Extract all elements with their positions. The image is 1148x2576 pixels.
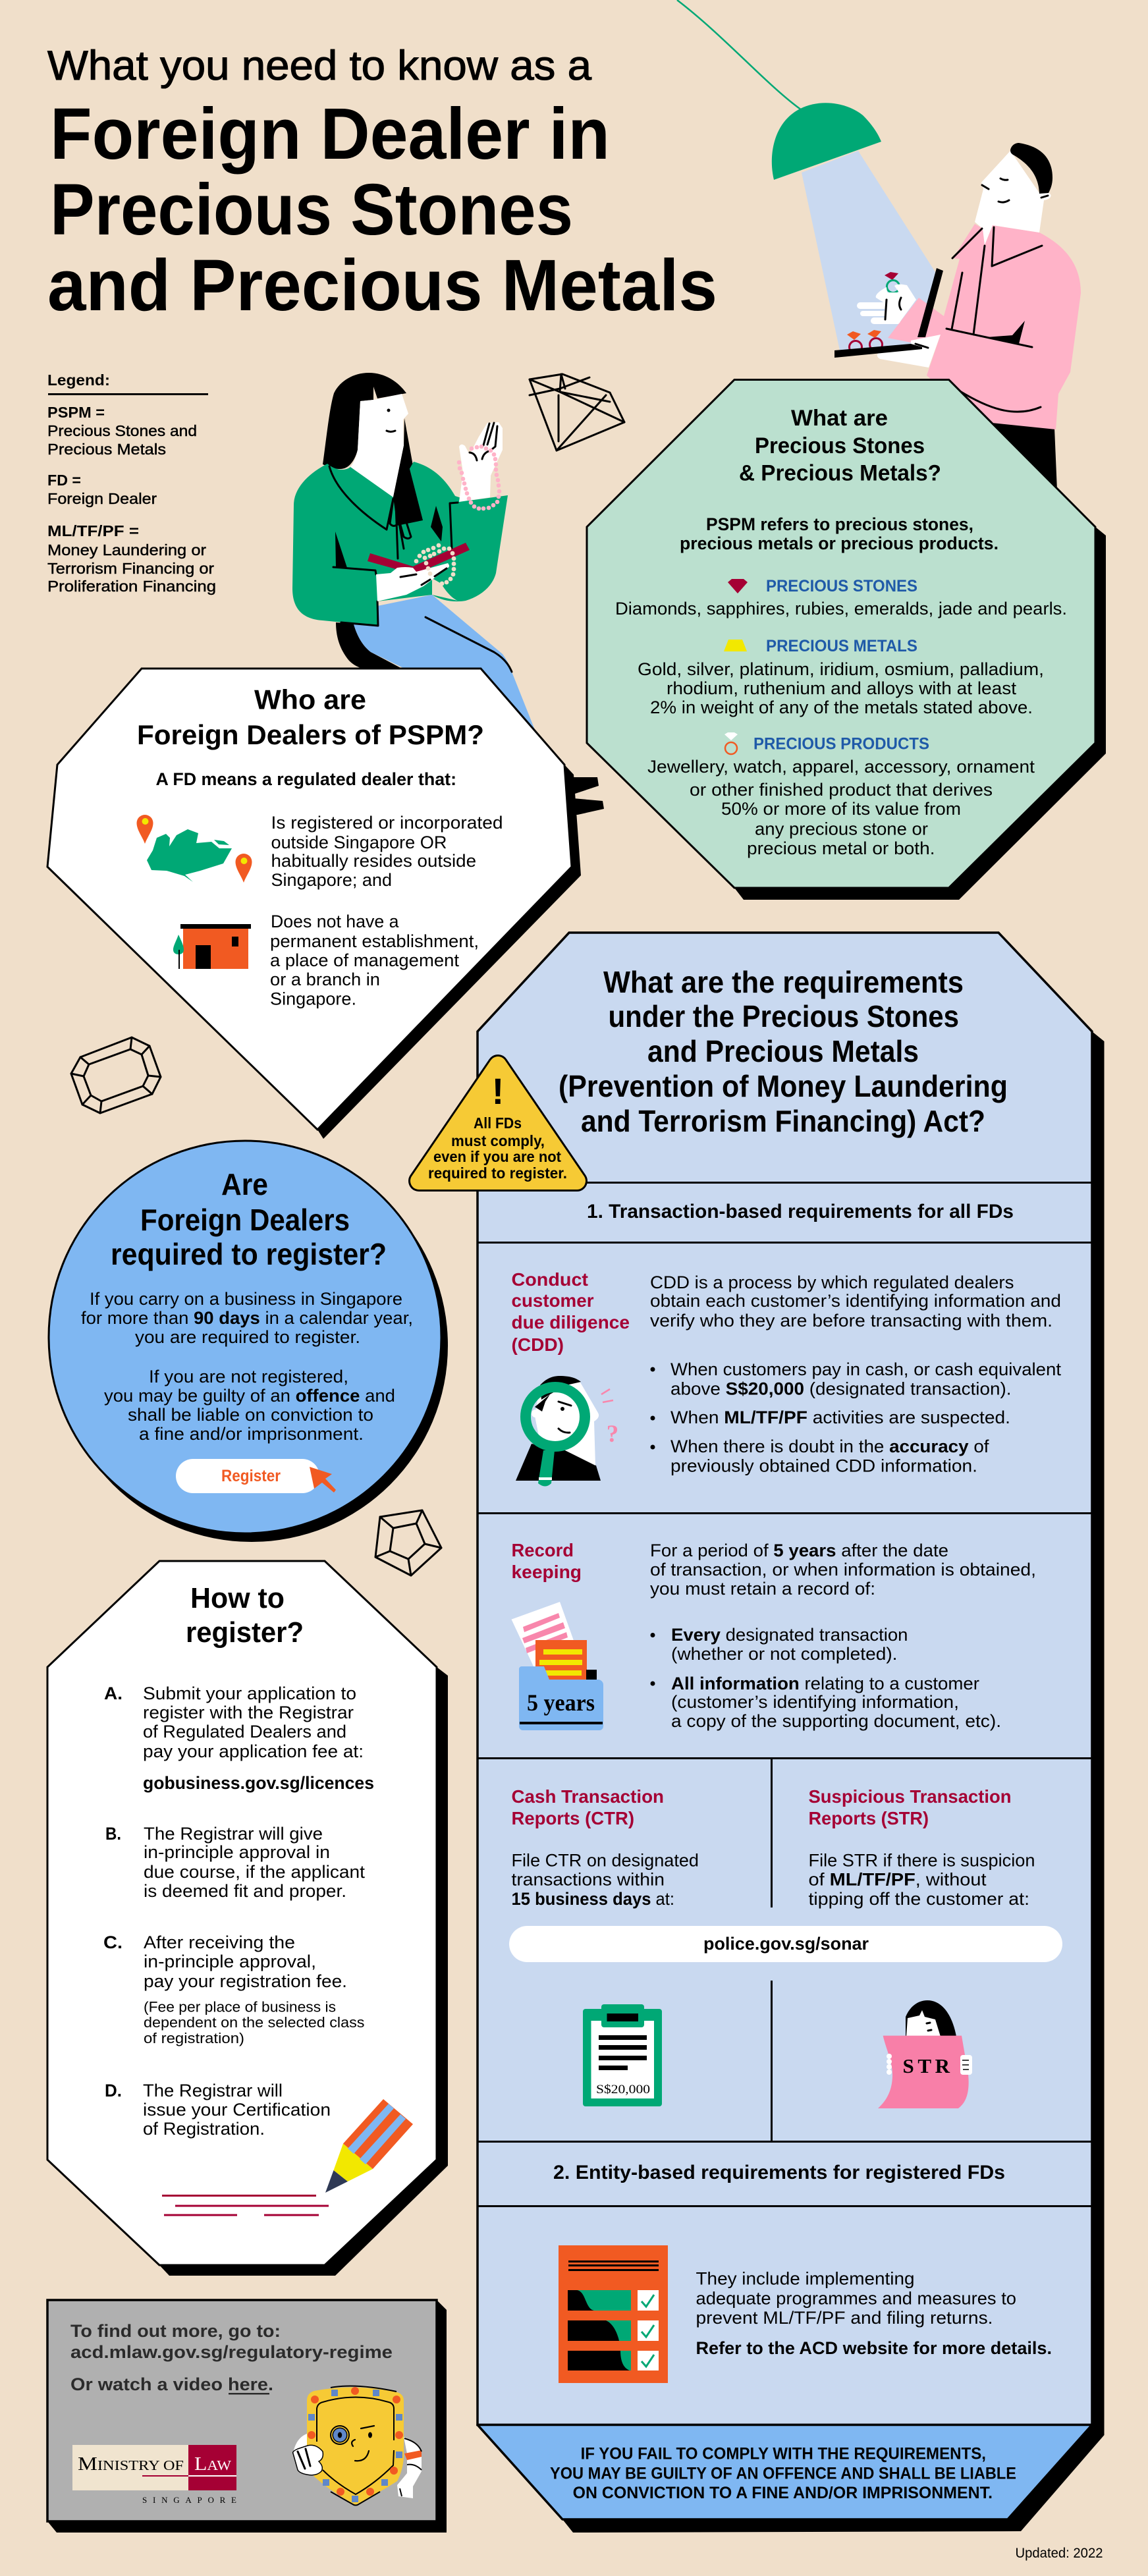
CDD label: due diligence — [511, 1312, 630, 1332]
icon: clipboard: S$20,000 — [596, 2083, 650, 2096]
CTR text: File CTR on designated — [511, 1851, 699, 1871]
warning banner: ON CONVICTION TO A FINE AND/OR IMPRISONMENT. — [573, 2484, 993, 2502]
CDD description: verify who they are before transacting with them. — [650, 1311, 1052, 1330]
heading: How to — [190, 1582, 285, 1614]
record keeping description: For a period of 5 years after the date — [650, 1541, 948, 1560]
record keeping description: Every designated transaction — [671, 1625, 908, 1645]
entity-based description — [696, 2268, 1052, 2358]
logo: Ministry of Law: LAW — [194, 2453, 231, 2475]
step A: of Regulated Dealers and — [143, 1722, 346, 1741]
CDD description: When ML/TF/PF activities are suspected. — [670, 1408, 1010, 1427]
icon: clipboard — [583, 2004, 662, 2106]
entity-based description: Refer to the ACD website for more details. — [696, 2338, 1052, 2358]
step B: B. — [105, 1824, 121, 1844]
step A: Submit your application to — [143, 1684, 356, 1703]
written lines — [162, 2195, 329, 2216]
heading: register? — [186, 1616, 304, 1649]
heading: What are — [791, 406, 888, 431]
icon: folder with documents: 5 years — [527, 1689, 595, 1716]
STR text: tipping off the customer at: — [809, 1889, 1029, 1909]
icon: man with magnifying glass — [516, 1376, 618, 1486]
step C — [103, 1932, 365, 2046]
STR text — [809, 1786, 1035, 1909]
precious stones text: Diamonds, sapphires, rubies, emeralds, jade and pearls. — [615, 599, 1067, 618]
step A: A. — [104, 1684, 123, 1703]
legend: Money Laundering or — [47, 541, 206, 559]
logo: Ministry of Law: SINGAPORE — [142, 2495, 236, 2505]
intro text: PSPM refers to precious stones, — [706, 514, 973, 534]
precious products text: precious metal or both. — [747, 838, 935, 858]
icon: folder with documents — [511, 1602, 603, 1730]
precious metals text: 2% in weight of any of the metals stated above. — [650, 698, 1033, 717]
STR text: File STR if there is suspicion — [809, 1851, 1035, 1871]
CDD label: Conduct — [511, 1269, 588, 1290]
callout: all FDs must comply — [419, 1065, 577, 1182]
step C: (Fee per place of business is — [144, 1998, 336, 2015]
warning banner: YOU MAY BE GUILTY OF AN OFFENCE AND SHALL BE LIABLE — [550, 2465, 1016, 2483]
CTR text: Cash Transaction — [511, 1786, 664, 1807]
text block: shall be liable on conviction to — [128, 1405, 373, 1425]
step B — [105, 1824, 366, 1901]
callout: all FDs must comply: required to register. — [428, 1165, 567, 1182]
heading — [111, 1167, 387, 1271]
legend: Proliferation Financing — [47, 578, 216, 595]
step D: issue your Certification — [143, 2100, 331, 2120]
step C: in-principle approval, — [144, 1952, 316, 1971]
heading: (Prevention of Money Laundering — [559, 1069, 1008, 1103]
legend: Precious Stones and — [47, 422, 197, 439]
text block: for more than 90 days in a calendar year, — [81, 1308, 413, 1328]
precious stones text — [615, 577, 1067, 618]
STR text: of ML/TF/PF , without — [809, 1870, 987, 1890]
link pill: police.gov.sg/sonar: police.gov.sg/sonar — [703, 1934, 869, 1954]
record keeping description: All information relating to a customer — [671, 1674, 979, 1693]
step A: gobusiness.gov.sg/licences — [143, 1773, 374, 1793]
CDD description: When there is doubt in the accuracy of — [670, 1437, 989, 1456]
panel: what are precious stones and metals — [587, 379, 1106, 900]
heading: Who are — [254, 684, 366, 715]
text block: you may be guilty of an offence and — [104, 1386, 395, 1406]
icon: gold bar — [724, 640, 747, 651]
panel: are foreign dealers required to register — [49, 1141, 448, 1542]
record keeping description: a copy of the supporting document, etc). — [671, 1711, 1001, 1731]
precious products text: 50% or more of its value from — [721, 799, 961, 819]
step A: register with the Registrar — [143, 1703, 354, 1722]
precious products text: or other finished product that derives — [690, 780, 993, 800]
icon: pencil writing — [325, 2099, 413, 2193]
legend: Foreign Dealer — [47, 490, 157, 507]
icon: checklist document — [559, 2245, 668, 2383]
step C: of registration) — [144, 2030, 244, 2046]
title: and Precious Metals — [47, 245, 717, 326]
precious metals text — [638, 637, 1044, 717]
text: first criterion: Singapore; and — [271, 870, 392, 890]
panel: who are foreign dealers — [47, 669, 581, 1139]
icon: man with magnifying glass: ? — [607, 1421, 618, 1448]
title: Foreign Dealer in — [50, 94, 610, 175]
panel: how to register — [47, 1561, 448, 2276]
text: first criterion: habitually resides outside — [271, 851, 476, 871]
icon: ruby — [728, 579, 748, 593]
text: second criterion: Does not have a — [271, 912, 399, 931]
text block — [81, 1289, 413, 1444]
heading: Are — [221, 1167, 268, 1201]
heading: Precious Stones — [755, 433, 925, 458]
step A — [104, 1684, 374, 1793]
CDD description: When customers pay in cash, or cash equivalent — [670, 1359, 1062, 1379]
warning banner — [478, 2425, 1092, 2519]
step B: The Registrar will give — [144, 1824, 323, 1844]
text: second criterion: Singapore. — [270, 989, 356, 1009]
step A: pay your application fee at: — [143, 1741, 364, 1761]
intro text — [680, 514, 998, 553]
precious products text: Jewellery, watch, apparel, accessory, ornament — [647, 757, 1035, 777]
step D: The Registrar will — [143, 2081, 283, 2100]
legend: FD = — [47, 472, 81, 489]
arrow: cursor — [310, 1467, 336, 1493]
links text: Or watch a video here. — [70, 2374, 273, 2394]
section heading 2: 2. Entity-based requirements for registered FDs — [553, 2162, 1005, 2183]
heading — [739, 406, 941, 486]
CDD description: above S$20,000 (designated transaction). — [670, 1379, 1012, 1399]
logo: Ministry of Law: MINISTRY OF — [78, 2453, 184, 2475]
precious products text: PRECIOUS PRODUCTS — [753, 735, 929, 754]
panel: find out more — [47, 2300, 447, 2533]
callout: all FDs must comply: All FDs — [474, 1114, 522, 1132]
legend: Legend: — [47, 371, 110, 389]
text block: If you are not registered, — [149, 1367, 348, 1386]
CTR text: Reports (CTR) — [511, 1808, 634, 1828]
step C: dependent on the selected class — [144, 2014, 365, 2031]
subheading: A FD means a regulated dealer that: — [155, 769, 456, 789]
callout: all FDs must comply: ! — [492, 1070, 504, 1112]
CTR text: transactions within — [511, 1870, 665, 1890]
callout: all FDs must comply: even if you are not — [433, 1148, 561, 1165]
legend: ML/TF/PF = — [47, 522, 139, 539]
icon: woman holding STR report — [878, 2000, 972, 2108]
CDD description: CDD is a process by which regulated dealers — [650, 1273, 1014, 1292]
step D — [105, 2081, 331, 2139]
illustration: man holding ring — [834, 143, 1081, 501]
record keeping description: you must retain a record of: — [650, 1579, 875, 1599]
entity-based description: adequate programmes and measures to — [696, 2289, 1016, 2309]
text: first criterion: outside Singapore OR — [271, 833, 447, 852]
links text: To find out more, go to: — [70, 2321, 281, 2341]
heading: Foreign Dealers of PSPM? — [137, 719, 484, 750]
title: What you need to know as a — [47, 43, 592, 89]
links text — [70, 2321, 393, 2395]
text: second criterion: permanent establishment, — [270, 931, 479, 951]
heading: Foreign Dealers — [140, 1203, 350, 1237]
CDD label: customer — [511, 1290, 594, 1311]
warning banner: IF YOU FAIL TO COMPLY WITH THE REQUIREMENTS, — [581, 2445, 986, 2463]
icon: ring — [724, 732, 738, 754]
title — [47, 43, 717, 326]
register button — [176, 1459, 319, 1493]
precious metals text: PRECIOUS METALS — [766, 637, 917, 655]
step C: pay your registration fee. — [144, 1971, 347, 1991]
record keeping description: (whether or not completed). — [671, 1644, 897, 1664]
step C: After receiving the — [144, 1932, 295, 1952]
record keeping label — [511, 1540, 582, 1582]
step B: in-principle approval in — [144, 1842, 330, 1862]
precious products text — [647, 735, 1035, 858]
lamp with light cone — [677, 0, 935, 350]
entity-based description: prevent ML/TF/PF and filing returns. — [696, 2308, 993, 2328]
STR text: Suspicious Transaction — [809, 1786, 1012, 1807]
CDD description: previously obtained CDD information. — [670, 1456, 977, 1476]
illustration: woman with jewellery — [292, 373, 537, 736]
text block: If you carry on a business in Singapore — [90, 1289, 402, 1309]
heading — [137, 684, 484, 750]
step D: D. — [105, 2081, 122, 2100]
precious metals text: Gold, silver, platinum, iridium, osmium, palladium, — [638, 659, 1044, 679]
updated note: Updated: 2022 — [1016, 2546, 1103, 2561]
record keeping description: of transaction, or when information is obtained, — [650, 1560, 1036, 1579]
CDD label: (CDD) — [511, 1334, 564, 1355]
CTR text — [511, 1786, 699, 1909]
legend — [47, 371, 216, 595]
precious stones text: PRECIOUS STONES — [766, 577, 917, 595]
text block: you are required to register. — [135, 1327, 360, 1347]
legend: PSPM = — [47, 404, 105, 421]
heading: & Precious Metals? — [739, 461, 941, 486]
CTR text: 15 business days at: — [511, 1889, 674, 1909]
panel dividers — [478, 1182, 1092, 2207]
entity-based description: They include implementing — [696, 2268, 914, 2288]
text: first criterion: Is registered or incorporated — [271, 813, 503, 833]
heading: and Precious Metals — [647, 1034, 919, 1068]
legend: Precious Metals — [47, 441, 166, 458]
STR text: Reports (STR) — [809, 1808, 929, 1828]
precious products text: any precious stone or — [755, 819, 928, 839]
link pill: police.gov.sg/sonar — [509, 1926, 1062, 1962]
heading — [559, 965, 1008, 1138]
icon: emerald-cut gem outline — [71, 1037, 161, 1113]
step B: is deemed fit and proper. — [144, 1881, 346, 1901]
intro text: precious metals or precious products. — [680, 534, 998, 553]
record keeping description: (customer’s identifying information, — [671, 1692, 959, 1712]
heading: What are the requirements — [603, 965, 964, 999]
stool legs — [566, 777, 604, 815]
icon: shield mascot — [293, 2386, 422, 2506]
CDD label — [511, 1269, 630, 1355]
section heading 1: 1. Transaction-based requirements for all FDs — [587, 1201, 1014, 1222]
icon: diamond outline — [530, 374, 624, 451]
CDD description — [650, 1273, 1062, 1476]
step C: C. — [103, 1932, 123, 1952]
links text: acd.mlaw.gov.sg/regulatory-regime — [70, 2342, 393, 2362]
record keeping label: keeping — [511, 1562, 582, 1582]
step B: due course, if the applicant — [144, 1862, 366, 1882]
step D: of Registration. — [143, 2119, 265, 2139]
record keeping description — [650, 1541, 1036, 1731]
legend: Terrorism Financing or — [47, 560, 214, 577]
title: Precious Stones — [50, 169, 573, 250]
callout: all FDs must comply: must comply, — [451, 1132, 545, 1149]
logo: Ministry of Law — [72, 2445, 236, 2505]
heading: required to register? — [111, 1237, 387, 1271]
icon: map of Singapore with pins — [137, 815, 252, 883]
register button: Register — [221, 1467, 281, 1485]
heading: and Terrorism Financing) Act? — [581, 1104, 985, 1138]
heading: under the Precious Stones — [609, 999, 959, 1033]
record keeping label: Record — [511, 1540, 574, 1560]
CDD description: obtain each customer’s identifying information and — [650, 1291, 1061, 1311]
icon: woman holding STR report: STR — [902, 2054, 950, 2077]
icon: building with tree — [173, 924, 251, 969]
text block: a fine and/or imprisonment. — [139, 1424, 364, 1444]
panel: requirements under the act — [478, 933, 1104, 2533]
icon: pentagon gem outline — [375, 1510, 441, 1576]
text: second criterion — [270, 912, 479, 1009]
precious metals text: rhodium, ruthenium and alloys with at least — [667, 678, 1017, 698]
text: second criterion: a place of management — [270, 950, 460, 970]
text: second criterion: or a branch in — [270, 970, 380, 989]
heading — [186, 1582, 304, 1649]
text: first criterion — [271, 813, 503, 890]
